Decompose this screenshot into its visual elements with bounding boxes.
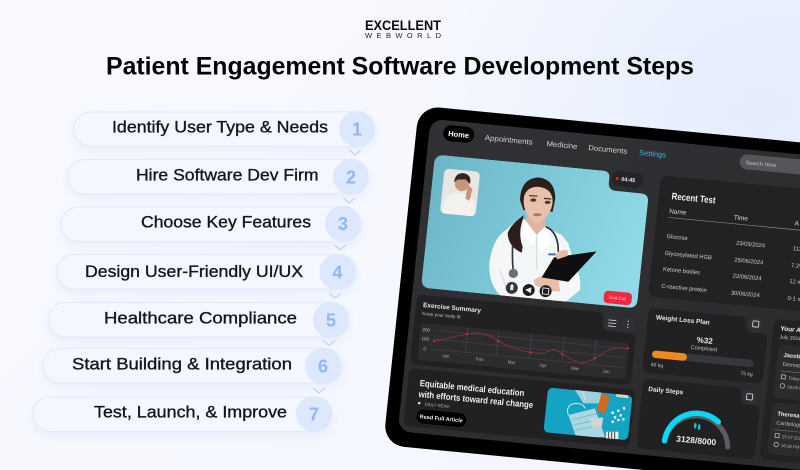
line chart: Feb xyxy=(476,356,484,362)
navigation bar: Medicine xyxy=(546,139,578,151)
step 1 xyxy=(74,111,375,147)
step 5: 5 xyxy=(326,310,336,330)
navigation bar: Appointments xyxy=(484,133,533,147)
filter buttons xyxy=(604,315,636,332)
line chart: Jan xyxy=(442,353,450,359)
title: Patient Engagement Software Development Steps xyxy=(106,52,694,80)
panel: recent test: C-reactive protein xyxy=(661,284,707,294)
steps gauge: 3128/8000 xyxy=(676,434,717,447)
arrow 5 xyxy=(323,340,335,346)
panel: recent test: Ketone bodies xyxy=(663,267,700,276)
panel: weight loss plan: %32 xyxy=(696,335,714,346)
end call button xyxy=(603,290,632,305)
step 4: Design User-Friendly UI/UX xyxy=(85,263,303,281)
panel: recent test: 30/06/2024 xyxy=(731,290,761,299)
step 3 xyxy=(61,206,361,242)
step 3: Choose Key Features xyxy=(141,214,311,232)
step 7: Test, Launch, & Improve xyxy=(94,404,287,422)
panel: recent test: Name xyxy=(669,208,687,217)
step 2 xyxy=(68,159,369,195)
panel: recent test: Glucose xyxy=(666,234,688,242)
appointment card 1: Today xyxy=(788,375,800,382)
panel: weight loss plan xyxy=(642,306,769,384)
panel: exercise summary: Exercise Summary xyxy=(423,302,482,315)
step 4 xyxy=(57,254,356,290)
progress bar xyxy=(652,350,754,367)
logo xyxy=(365,17,442,40)
panel: daily steps xyxy=(636,379,762,460)
tablet xyxy=(383,106,800,470)
step 5 xyxy=(48,302,349,338)
video call timer xyxy=(611,170,644,188)
line chart xyxy=(417,323,629,380)
line chart: Apr xyxy=(540,363,548,368)
step 4: 4 xyxy=(332,262,343,282)
arrow 6 xyxy=(313,388,325,393)
search box: Search Here xyxy=(745,160,777,169)
doctor xyxy=(489,177,597,307)
panel: recent test: 25/06/2024 xyxy=(734,258,764,266)
end call button: End Call xyxy=(609,295,626,301)
panel: article: DAILY READ xyxy=(424,402,450,409)
panel: recent test: 22/06/2024 xyxy=(732,274,763,282)
call controls xyxy=(505,281,552,298)
step 2: Hire Software Dev Firm xyxy=(136,166,318,184)
panel: recent test: Glycosylated HGB xyxy=(664,251,712,261)
patient thumbnail xyxy=(440,168,480,218)
logo: WEBWORLD xyxy=(365,31,442,40)
step 2: 2 xyxy=(346,168,356,188)
arrow 2 xyxy=(344,198,355,203)
appointment card 2 xyxy=(767,402,800,465)
tablet screen xyxy=(398,119,800,470)
video call timer: 04:45 xyxy=(621,177,636,184)
read article button xyxy=(416,409,467,428)
arrow 4 xyxy=(329,293,341,298)
navigation bar xyxy=(442,125,667,162)
arrow 1 xyxy=(350,150,361,155)
line chart: Mar xyxy=(507,359,516,365)
read article button: Read Full Article xyxy=(419,414,463,424)
step 6 xyxy=(43,348,342,384)
panel: recent test: 23/05/2024 xyxy=(736,241,766,250)
panel: recent test: Recent Test xyxy=(671,191,717,207)
line chart: 100 xyxy=(421,336,430,342)
step 3: 3 xyxy=(338,214,348,234)
arrow 3 xyxy=(334,245,346,250)
panel: recent test: A xyxy=(794,220,800,228)
panel: article xyxy=(403,366,635,447)
panel: weight loss plan: 75 kg xyxy=(740,371,753,378)
panel: weight loss plan: Completed xyxy=(690,345,717,353)
step 5: Healthcare Compliance xyxy=(104,310,297,328)
navigation bar: Documents xyxy=(588,143,628,156)
navigation bar: Settings xyxy=(639,148,667,160)
step 1: 1 xyxy=(352,120,362,140)
panel: daily steps: Daily Steps xyxy=(648,386,684,396)
step 6: 6 xyxy=(318,356,328,376)
search box xyxy=(739,154,800,180)
panel: article: Equitable medical education xyxy=(419,378,525,398)
panel: recent test xyxy=(648,175,800,322)
panel: exercise summary xyxy=(410,294,638,385)
video call panel xyxy=(422,155,648,308)
panel: weight loss plan: Weight Loss Plan xyxy=(656,314,710,327)
step 7 xyxy=(33,396,332,432)
line chart: 0 xyxy=(423,346,427,352)
step 7: 7 xyxy=(309,404,319,424)
line chart: Jun xyxy=(602,369,610,374)
line chart: 200 xyxy=(422,327,431,333)
navigation bar: Home xyxy=(448,129,469,140)
panel: article: with efforts toward real change xyxy=(417,389,534,410)
step 1: Identify User Type & Needs xyxy=(112,118,328,136)
logo: EXCELLENT xyxy=(365,17,441,33)
appointment card 1 xyxy=(773,344,800,409)
line chart: Mar xyxy=(571,366,580,371)
panel: weight loss plan: 65 kg xyxy=(651,362,664,369)
article image xyxy=(544,388,632,440)
panel: exercise summary: Keep your body fit xyxy=(422,311,462,321)
panel: your appointments xyxy=(760,319,800,470)
panel: recent test: Time xyxy=(733,214,749,223)
step 6: Start Building & Integration xyxy=(72,356,292,374)
appointment card 2: 06:38 PM xyxy=(781,443,800,450)
